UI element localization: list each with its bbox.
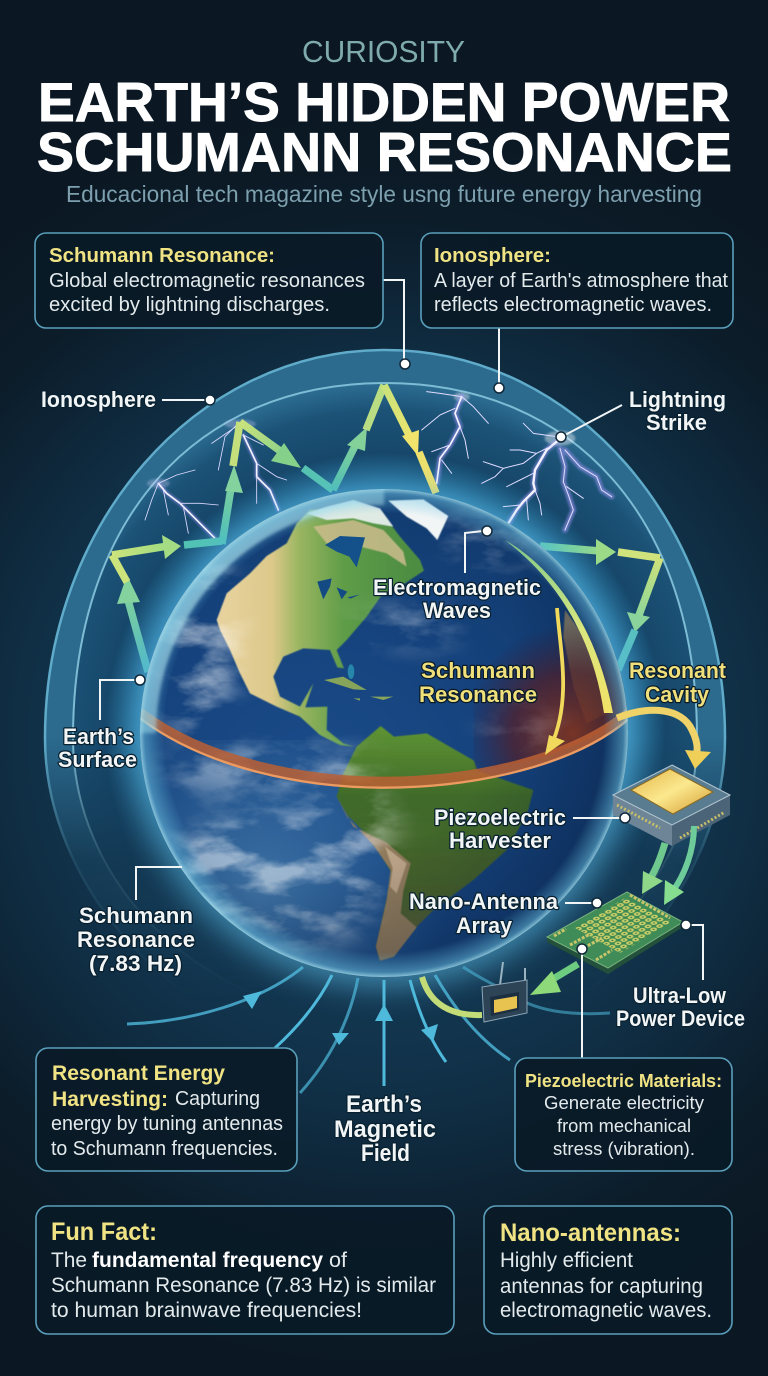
device body <box>482 980 527 1022</box>
device antennas <box>500 962 525 985</box>
subtitle: Educacional tech magazine style usng future energy harvesting <box>66 181 702 207</box>
label: electromagnetic waves: Waves <box>423 598 491 623</box>
antenna dot grid <box>575 898 672 953</box>
andes mountains <box>337 797 417 961</box>
panel: ionosphere definition: A layer of Earth's atmosphere that <box>434 269 728 292</box>
arrow: board to device <box>530 964 578 995</box>
callout: schumann frequency line <box>136 867 182 900</box>
field line vertical <box>382 980 386 1086</box>
panel: piezoelectric materials: Generate electricity <box>544 1093 704 1113</box>
cloud texture <box>156 507 563 956</box>
icon: south america <box>337 726 533 961</box>
chip right side <box>672 795 730 846</box>
arrow: earth to device <box>422 977 482 1015</box>
label: earth's surface: Earth’s <box>63 724 134 749</box>
label: schumann resonance 7.83 Hz <box>77 903 195 976</box>
panel: piezoelectric materials: Piezoelectric Materials: <box>525 1071 722 1091</box>
label: nano-antenna array: Array <box>456 913 513 938</box>
panel: schumann resonance definition: excited by lightning discharges. <box>49 293 330 316</box>
field line down <box>300 978 358 1093</box>
caribbean islands <box>324 677 393 701</box>
label: earth's surface: Surface <box>58 747 137 772</box>
field line outer right <box>435 975 510 1060</box>
icon: nano-antenna array board <box>547 892 683 974</box>
board gold contacts <box>554 895 670 960</box>
kicker: CURIOSITY <box>302 34 465 69</box>
panel: piezoelectric materials: stress (vibration). <box>553 1139 695 1159</box>
earth shading <box>222 597 624 974</box>
arrow: electromagnetic zigzag waves (left) <box>112 385 436 672</box>
panel: fun fact: Fun Fact: <box>51 1218 157 1246</box>
panel: resonant energy harvesting: Capturing <box>175 1088 260 1110</box>
panel: schumann resonance definition: Schumann Resonance: <box>49 244 275 267</box>
panel: earth globe <box>139 480 631 980</box>
label: earth's magnetic field <box>334 1091 436 1167</box>
earth ocean <box>140 489 628 977</box>
panel: nano-antennas: electromagnetic waves. <box>500 1299 712 1322</box>
label: resonant cavity <box>629 658 727 707</box>
panel: resonant energy harvesting <box>36 1048 297 1171</box>
title block <box>37 34 732 207</box>
panel: resonant energy harvesting: to Schumann frequencies. <box>51 1138 278 1160</box>
great lakes <box>317 578 360 599</box>
label: resonant cavity: Resonant <box>629 658 727 683</box>
callout: ultra low line <box>681 920 703 980</box>
device gold chip <box>494 996 517 1013</box>
callout: ionosphere line <box>162 395 215 405</box>
panel: nano-antennas: antennas for capturing <box>500 1275 703 1298</box>
panel: resonant energy harvesting: Resonant Energy <box>52 1062 225 1085</box>
resonant cavity inner shell <box>72 382 698 932</box>
icon: ultra-low power device <box>482 962 527 1022</box>
arrow: yellow to harvester <box>617 710 711 769</box>
north canada tundra <box>313 520 407 567</box>
field line behind device <box>463 967 610 1014</box>
chip gold plate <box>631 769 713 814</box>
chip top <box>613 765 730 825</box>
arrow: harvester to nano array <box>642 826 694 905</box>
panel: fun fact <box>36 1206 454 1334</box>
chip circuit traces <box>617 805 725 838</box>
label: nano-antenna array <box>409 889 559 938</box>
title block: SCHUMANN RESONANCE <box>37 121 732 183</box>
panel: fun fact: to human brainwave frequencies! <box>51 1299 362 1322</box>
africa silhouette <box>563 610 607 723</box>
panel: nano-antennas: Highly efficient <box>500 1249 633 1272</box>
red cavity tint <box>474 630 626 769</box>
field line to box <box>275 975 332 1048</box>
hudson bay <box>325 536 365 567</box>
panel: fun fact: fundamental frequency <box>92 1249 323 1272</box>
equatorial cavity band <box>139 712 631 788</box>
panel: nano-antennas <box>484 1206 732 1334</box>
panel: ionosphere definition: Ionosphere: <box>434 244 551 267</box>
label: lightning strike: Strike <box>646 410 707 435</box>
label: schumann resonance: Schumann <box>421 658 535 683</box>
polar atmosphere wash <box>140 489 384 733</box>
label: earth's surface <box>58 724 137 772</box>
label: piezoelectric harvester: Harvester <box>449 828 551 853</box>
label: resonant cavity: Cavity <box>645 682 710 707</box>
label: lightning strike: Lightning <box>629 387 726 412</box>
callout: em waves line <box>465 526 492 573</box>
lightning right <box>422 392 612 530</box>
panel: resonant energy harvesting: Harvesting: <box>52 1088 168 1111</box>
map in 3x local coordinates <box>217 499 630 961</box>
panel: resonant energy harvesting: energy by tuning antennas <box>51 1113 283 1135</box>
lightning left <box>145 419 287 538</box>
label: ultra-low power device <box>616 983 745 1031</box>
label: piezoelectric harvester <box>434 805 566 853</box>
ionosphere outer shell <box>44 348 726 951</box>
label: schumann resonance 7.83 Hz: (7.83 Hz) <box>89 951 182 976</box>
label: schumann resonance 7.83 Hz: Resonance <box>77 927 195 952</box>
panel: piezoelectric materials <box>515 1058 732 1171</box>
icon: piezoelectric harvester chip <box>613 765 730 846</box>
device screen <box>490 992 519 1016</box>
long arc <box>505 540 613 713</box>
label: schumann resonance: Resonance <box>419 682 537 707</box>
label: schumann resonance <box>419 658 537 707</box>
panel: fun fact: Schumann Resonance (7.83 Hz) is similar <box>51 1274 436 1297</box>
panel: fun fact: The <box>51 1249 87 1272</box>
label: ultra-low power device: Power Device <box>616 1006 745 1031</box>
panel: schumann resonance definition: Global electromagnetic resonances <box>49 269 365 292</box>
label: lightning strike <box>629 387 726 435</box>
chip left side <box>613 795 672 846</box>
icon: north america <box>217 503 424 747</box>
callout: earth surface line <box>100 675 145 720</box>
panel: piezoelectric materials: from mechanical <box>557 1116 691 1136</box>
panel: nano-antennas: Nano-antennas: <box>500 1219 681 1247</box>
callout: piezoelectric materials line <box>577 944 587 1058</box>
label: piezoelectric harvester: Piezoelectric <box>434 805 566 830</box>
panel: schumann resonance definition <box>35 233 383 328</box>
arrow: yellow curved propagation arcs <box>505 540 613 755</box>
arrow: electromagnetic zigzag waves (right) <box>540 539 660 670</box>
callout: nano line <box>565 898 602 908</box>
callout: piezo line <box>573 813 630 823</box>
label: electromagnetic waves: Electromagnetic <box>373 575 541 600</box>
panel: ionosphere definition: reflects electromagnetic waves. <box>434 293 712 316</box>
field line sweeping left <box>127 967 303 1024</box>
callout: lightning line <box>556 405 622 442</box>
label: earth's magnetic field: Field <box>361 1140 410 1167</box>
callout: ionosphere box connector <box>494 328 504 393</box>
panel: atmosphere shells <box>44 348 726 956</box>
panel: fun fact: of <box>329 1249 347 1272</box>
label: earth's magnetic field: Earth’s <box>346 1091 422 1118</box>
earth halo glow <box>134 488 634 988</box>
earth atmosphere rim <box>140 489 628 977</box>
main title: EARTH’S HIDDEN POWER <box>38 71 730 133</box>
arctic ice <box>307 500 393 527</box>
label: nano-antenna array: Nano-Antenna <box>409 889 559 914</box>
schumann arrow <box>551 608 563 746</box>
field line right <box>410 980 446 1062</box>
board top <box>547 892 683 968</box>
board edge <box>547 922 683 974</box>
callout: schumann box connector <box>383 280 410 369</box>
panel: ionosphere definition <box>421 233 733 328</box>
greenland <box>388 499 448 540</box>
label: ultra-low power device: Ultra-Low <box>633 983 727 1008</box>
icon: lightning strikes <box>145 392 612 538</box>
label: electromagnetic waves <box>373 575 541 623</box>
magnetic field lines <box>127 967 610 1093</box>
label: schumann resonance 7.83 Hz: Schumann <box>79 903 193 928</box>
label: ionosphere: Ionosphere <box>41 387 156 412</box>
label: earth's magnetic field: Magnetic <box>334 1116 436 1143</box>
